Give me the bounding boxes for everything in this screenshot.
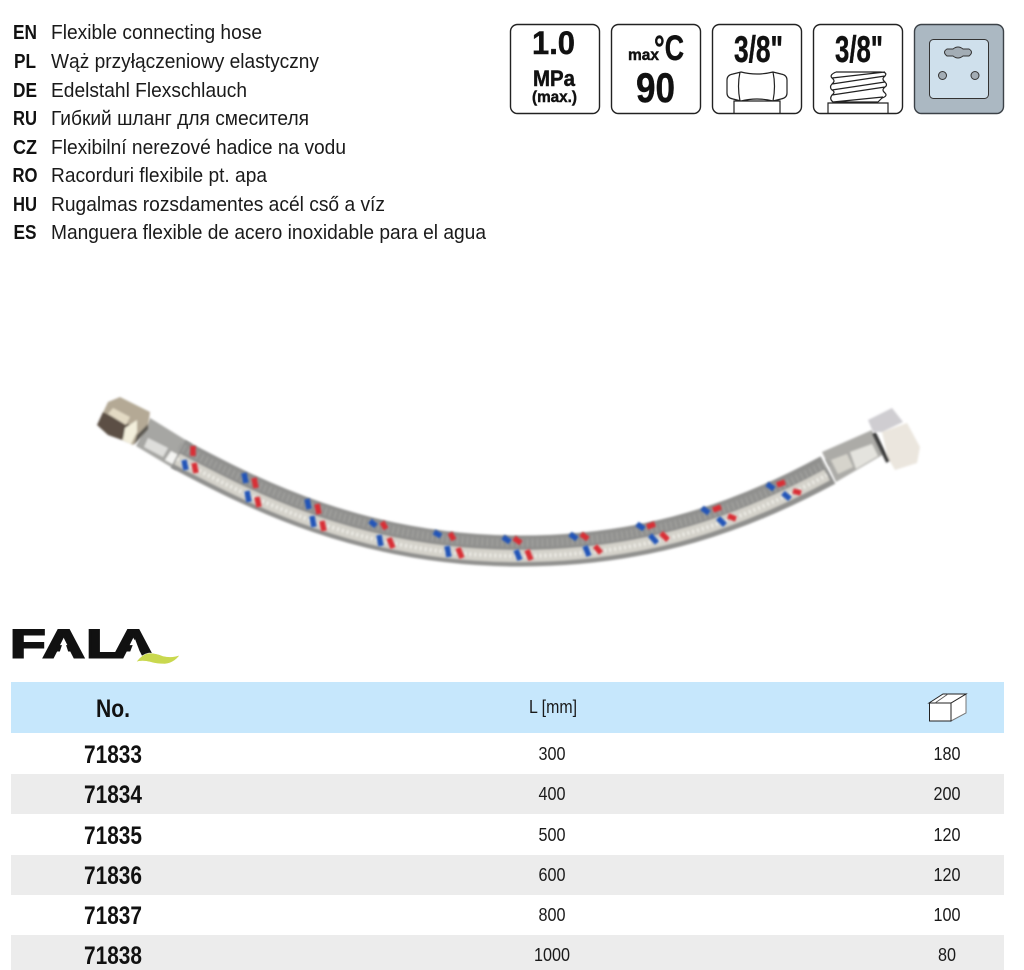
icon: 3/8 inch nut: 3/8" bbox=[734, 29, 783, 70]
icon: max temperature: °C bbox=[654, 29, 684, 68]
row 71837: 71837 bbox=[84, 902, 142, 930]
row 71834: 200 bbox=[934, 784, 960, 804]
icon: 3/8 inch thread bbox=[814, 24, 902, 114]
hose body bbox=[177, 446, 829, 556]
specification icons bbox=[510, 24, 1004, 114]
row 71835: 500 bbox=[538, 825, 566, 845]
product table bbox=[11, 682, 1004, 970]
product photo: braided hose bbox=[97, 397, 920, 560]
icon: max temperature: max bbox=[628, 47, 659, 64]
crossbar removal: second letter A bbox=[127, 639, 143, 660]
RU name: Гибкий шланг для смесителя bbox=[51, 107, 309, 130]
CZ name: Flexibilní nerezové hadice na vodu bbox=[51, 136, 346, 159]
icon: 3/8 inch nut bbox=[712, 24, 802, 114]
icon: pressure: 1.0 bbox=[532, 25, 575, 61]
row 71836 bbox=[11, 855, 1004, 895]
multilingual product names bbox=[12, 21, 487, 244]
RO name: RO bbox=[12, 165, 38, 187]
brand logo bbox=[10, 621, 180, 666]
right hex nut bbox=[868, 408, 920, 470]
icon: 3/8 inch thread: 3/8" bbox=[835, 29, 883, 70]
row 71837: 100 bbox=[934, 905, 960, 925]
ES name: Manguera flexible de acero inoxidable para el agua bbox=[51, 221, 487, 244]
DE name: Edelstahl Flexschlauch bbox=[51, 79, 247, 102]
row 71838 bbox=[11, 935, 1004, 970]
row 71836: 120 bbox=[934, 865, 960, 885]
row 71834: 71834 bbox=[84, 781, 142, 809]
icon: max temperature: 90 bbox=[636, 64, 675, 111]
row 71834: 400 bbox=[538, 784, 566, 804]
icon: pressure: MPa bbox=[533, 66, 576, 91]
EN name: Flexible connecting hose bbox=[51, 21, 262, 44]
row 71838: 71838 bbox=[84, 942, 142, 970]
red braid markers bbox=[193, 446, 801, 560]
row 71835: 120 bbox=[934, 825, 960, 845]
row 71836: 600 bbox=[538, 865, 566, 885]
row 71835: 71835 bbox=[84, 822, 142, 850]
row 71833: 300 bbox=[538, 744, 566, 764]
icon: pressure: (max.) bbox=[532, 89, 577, 106]
row 71837 bbox=[11, 895, 1004, 935]
table header bbox=[11, 682, 1004, 733]
CZ name: CZ bbox=[13, 137, 37, 159]
HU name: Rugalmas rozsdamentes acél cső a víz bbox=[51, 193, 385, 216]
icon: max temperature bbox=[612, 24, 700, 114]
PL name: Wąż przyłączeniowy elastyczny bbox=[51, 50, 320, 73]
row 71834 bbox=[11, 774, 1004, 814]
row 71835 bbox=[11, 814, 1004, 855]
ES name: ES bbox=[14, 222, 36, 244]
icon: pressure bbox=[510, 24, 600, 114]
HU name: HU bbox=[13, 194, 37, 216]
logo wordmark: FALA bbox=[10, 621, 154, 666]
table header: L [mm] bbox=[529, 697, 577, 717]
left threaded fitting bbox=[97, 397, 150, 445]
table header: No. bbox=[96, 695, 130, 723]
EN name: EN bbox=[13, 22, 37, 44]
DE name: DE bbox=[13, 80, 37, 102]
row 71833: 180 bbox=[934, 744, 960, 764]
RU name: RU bbox=[13, 108, 37, 130]
PL name: PL bbox=[14, 51, 36, 73]
row 71837: 800 bbox=[538, 905, 566, 925]
logo swoosh bbox=[136, 653, 180, 664]
row 71833 bbox=[11, 733, 1004, 774]
right neck bbox=[822, 430, 884, 482]
row 71838: 1000 bbox=[534, 945, 570, 965]
crossbar removal: first letter A bbox=[57, 639, 71, 660]
row 71833: 71833 bbox=[84, 741, 142, 769]
row 71836: 71836 bbox=[84, 862, 142, 890]
icon: wall mount plate bbox=[914, 24, 1004, 114]
blue braid markers bbox=[184, 460, 790, 560]
RO name: Racorduri flexibile pt. apa bbox=[51, 164, 268, 187]
icon: carton box bbox=[929, 694, 966, 721]
left neck bbox=[136, 418, 192, 470]
row 71838: 80 bbox=[938, 945, 956, 965]
